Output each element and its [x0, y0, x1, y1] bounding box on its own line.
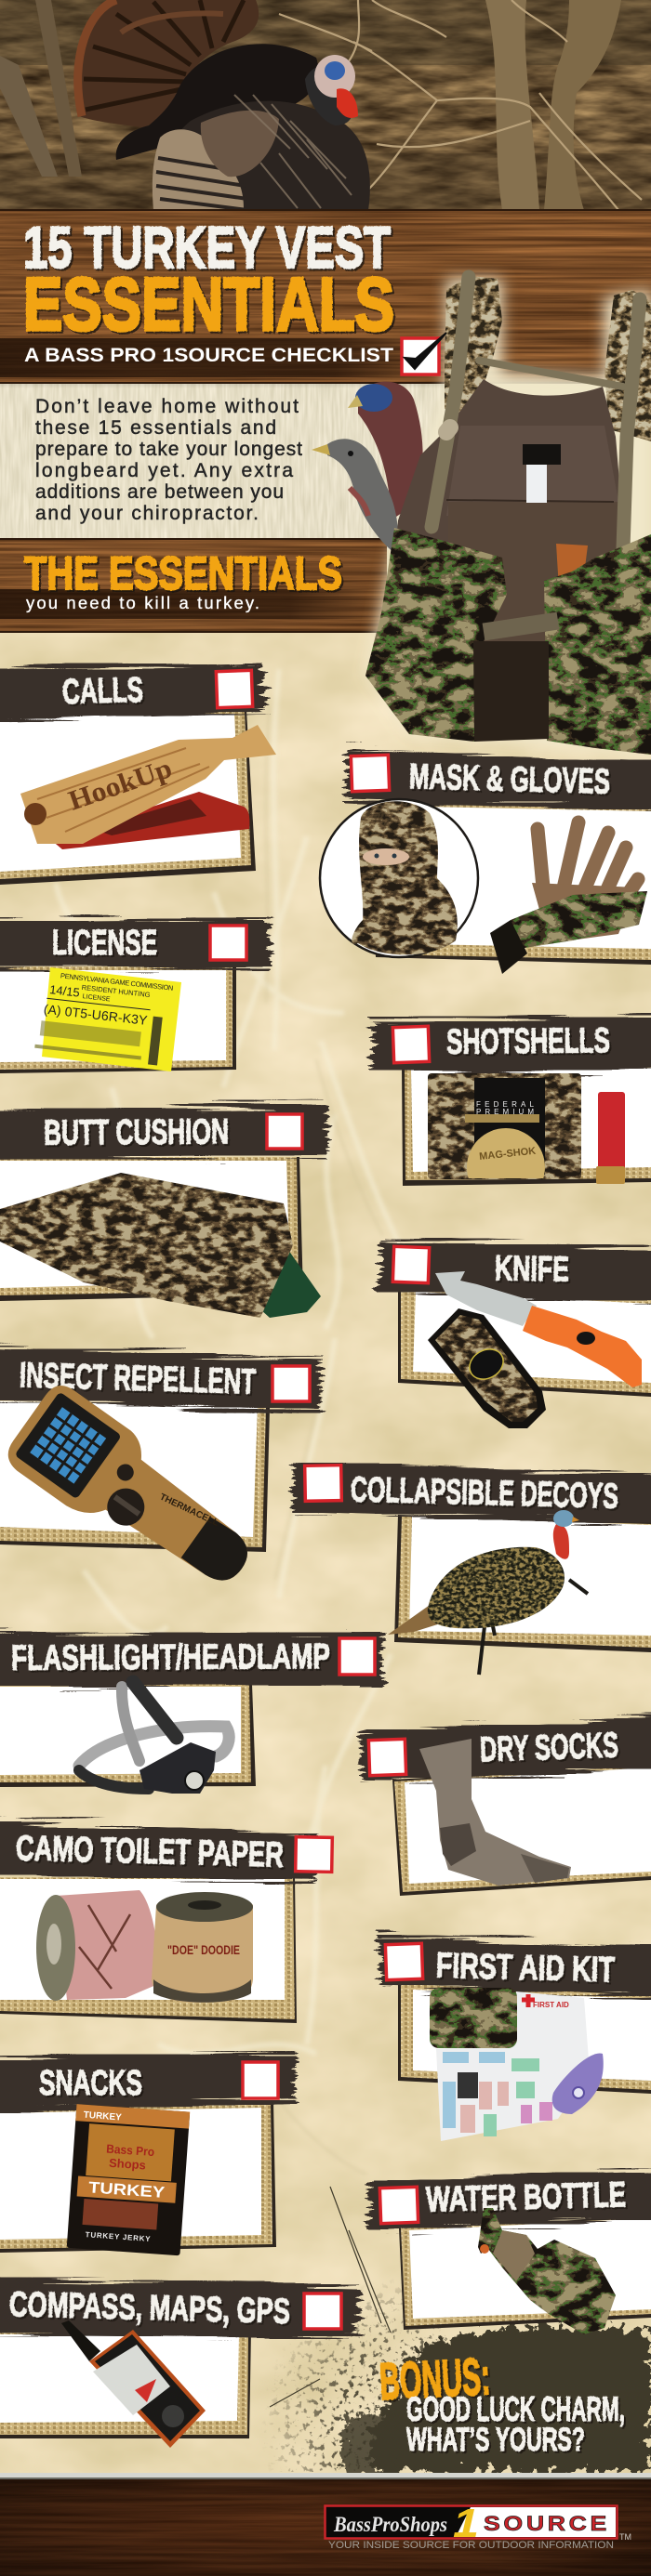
checkbox	[305, 1465, 341, 1501]
yellow hunting license: PENNSYLVANIA GAME COMMISSION	[60, 971, 174, 992]
checkbox	[216, 670, 253, 708]
vest shoulder pads	[445, 276, 502, 418]
mosquito repeller	[0, 1378, 270, 1610]
yellow hunting license: (A) 0T5-U6R-K3Y	[43, 1002, 149, 1028]
logo tagline: YOUR INSIDE SOURCE FOR OUTDOOR INFORMATION	[328, 2540, 614, 2551]
vest care tag	[526, 465, 547, 503]
turkey dark ruff	[116, 44, 318, 160]
turkey body	[153, 101, 370, 210]
logo: Bass Pro Shops 1Source: SOURCE	[484, 2512, 610, 2535]
panel: shotshells	[372, 1015, 651, 1206]
background: parchment	[0, 613, 651, 2481]
banner	[0, 2052, 296, 2112]
ammo box: PREMIUM	[476, 1108, 534, 1116]
banner	[379, 1936, 651, 1998]
right camo pocket	[544, 534, 651, 755]
heading: COMPASS, MAPS, GPS	[8, 2285, 290, 2332]
logo: Bass Pro Shops 1Source	[326, 2501, 631, 2546]
bare branches	[279, 0, 642, 210]
banner	[0, 1632, 383, 1686]
panel: first aid kit	[379, 1936, 651, 2141]
grey hen decoy	[312, 439, 398, 553]
yellow hunting license	[34, 967, 181, 1071]
logo: Bass Pro Shops 1Source: 1	[453, 2501, 479, 2546]
banner	[372, 1015, 651, 1072]
intro text: prepare to take your longest	[35, 439, 302, 460]
panel: mask and gloves	[320, 750, 651, 974]
gps handheld	[61, 2320, 206, 2448]
panel: the essentials wood board	[0, 538, 387, 633]
heading: CALLS	[61, 671, 144, 712]
mud splatter	[260, 2187, 651, 2474]
banner	[346, 750, 651, 811]
intro text: these 15 essentials and	[35, 417, 276, 439]
heading: INSECT REPELLENT	[19, 1356, 257, 1402]
jerky bag: TURKEY JERKY	[85, 2230, 152, 2243]
panel: license	[0, 917, 270, 1073]
checkbox	[379, 2187, 418, 2224]
footer: wood band	[0, 2473, 651, 2576]
banner	[0, 1820, 316, 1882]
heading: FLASHLIGHT/HEADLAMP	[11, 1637, 330, 1678]
panel: butt cushion	[0, 1104, 327, 1318]
banner	[0, 2278, 358, 2338]
banner	[0, 1104, 327, 1160]
checkbox	[392, 1026, 430, 1063]
callout: bonus	[379, 2346, 625, 2458]
jerky bag: TURKEY	[88, 2178, 166, 2201]
jerky bag	[67, 2104, 190, 2255]
yellow hunting license: RESIDENT HUNTING	[81, 983, 151, 999]
bonus question	[406, 2390, 625, 2458]
hero photo: turkey in woods	[0, 0, 651, 210]
doe doodie roll: "DOE" DOODIE	[167, 1942, 240, 1957]
checkbox	[272, 1366, 310, 1401]
ammo box	[428, 1073, 581, 1179]
checkbox	[368, 1739, 406, 1776]
heading: BUTT CUSHION	[44, 1112, 229, 1153]
water bottle holster	[478, 2208, 616, 2334]
heading: CAMO TOILET PAPER	[15, 1829, 284, 1875]
vest straps	[432, 277, 640, 548]
jerky bag: Bass Pro	[106, 2141, 155, 2159]
waist belt	[484, 621, 558, 632]
sock	[419, 1739, 571, 1886]
mask circle	[320, 799, 478, 957]
panel: snacks	[0, 2052, 296, 2255]
subtitle: checklist: A BASS PRO 1SOURCE CHECKLIST	[24, 345, 393, 366]
title: essentials: ESSENTIALS	[23, 263, 394, 347]
yellow hunting license: 14/15	[49, 982, 81, 1000]
gloves	[490, 822, 647, 974]
banner	[379, 1239, 651, 1304]
background tree trunks	[0, 0, 621, 210]
panel: water bottle	[368, 2170, 651, 2334]
banner	[0, 662, 265, 721]
box call: HookUp	[65, 753, 176, 817]
panel: compass maps gps	[0, 2278, 358, 2448]
subheading: you need to kill a turkey: you need to kill a turkey.	[26, 593, 259, 612]
vest fleece back	[395, 379, 625, 651]
banner	[368, 2170, 651, 2230]
cushion	[0, 1173, 321, 1318]
doe doodie roll	[152, 1892, 253, 2003]
checkbox	[304, 2293, 341, 2329]
title: 15 turkey vest: 15 TURKEY VEST	[23, 216, 391, 281]
intro text: additions are between you	[35, 481, 284, 503]
checkbox	[339, 1638, 375, 1675]
panel: collapsible decoys	[293, 1461, 651, 1675]
heading: the essentials: THE ESSENTIALS	[24, 547, 342, 599]
panel: camo toilet paper	[0, 1820, 332, 2023]
intro text: and your chiropractor.	[35, 503, 259, 524]
title checkbox with check	[402, 333, 446, 375]
ammo box: MAG-SHOK	[479, 1146, 537, 1163]
pink camo roll	[36, 1890, 158, 2001]
turkey neck and head	[305, 66, 352, 125]
logo: Bass Pro Shops 1Source: BassProShops	[333, 2513, 447, 2536]
ammo box: FEDERAL	[476, 1100, 535, 1109]
center dark panel	[473, 641, 549, 742]
panel: insect repellent	[0, 1346, 321, 1610]
turkey tail fan	[75, 0, 259, 130]
heading: KNIFE	[495, 1249, 569, 1290]
orange call in pocket	[556, 544, 588, 632]
turkey decoy	[388, 1510, 588, 1675]
sheath	[428, 1308, 546, 1428]
panel: flashlight headlamp	[0, 1632, 383, 1794]
banner	[293, 1461, 651, 1525]
intro text: longbeard yet. Any extra	[35, 460, 293, 481]
red hen decoy	[348, 382, 423, 520]
banner	[361, 1715, 651, 1782]
box call	[20, 725, 276, 849]
checkbox	[351, 755, 390, 792]
panel: title wood board	[0, 209, 651, 384]
logo: Bass Pro Shops 1Source: TM	[619, 2532, 631, 2542]
panel: dry socks	[361, 1715, 651, 1896]
checkbox	[210, 926, 246, 960]
banner	[0, 1346, 321, 1413]
bonus heading: BONUS:	[379, 2346, 492, 2411]
heading: LICENSE	[52, 924, 157, 963]
yellow hunting license: LICENSE	[82, 993, 111, 1003]
intro text: Don’t leave home without	[35, 396, 299, 417]
first aid contents: FIRST AID	[533, 2001, 569, 2009]
shell	[596, 1092, 625, 1184]
intro text	[35, 396, 302, 524]
knife	[435, 1271, 642, 1387]
checkbox	[243, 2062, 278, 2098]
mosquito repeller: THERMACELL	[158, 1492, 220, 1529]
left camo pocket	[365, 528, 507, 742]
panel: intro ribbed paper	[0, 383, 446, 550]
panel: knife	[379, 1239, 651, 1428]
illustration: hen decoys and camo vest	[312, 276, 651, 755]
jerky bag: Shops	[109, 2156, 146, 2172]
vest glow	[367, 279, 651, 755]
jerky bag: TURKEY	[83, 2110, 122, 2123]
vest label	[523, 444, 561, 465]
banner	[0, 917, 270, 970]
headlamp	[79, 1682, 229, 1794]
checkbox	[296, 1837, 332, 1872]
heading: SNACKS	[39, 2064, 142, 2103]
panel: calls	[0, 662, 276, 885]
first aid contents	[430, 1988, 604, 2141]
checkbox	[392, 1246, 430, 1283]
checkbox	[385, 1943, 423, 1980]
checkbox	[267, 1114, 302, 1149]
